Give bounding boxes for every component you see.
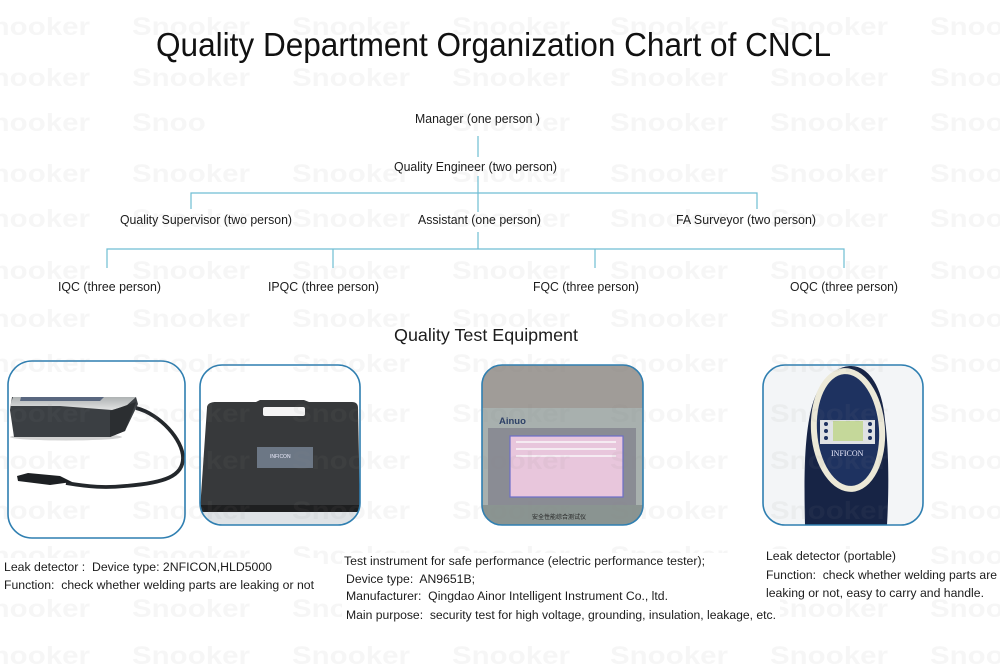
caption: electric performance tester: Manufacturer: Qingdao Ainor Intelligent Instrument Co., ltd. [346, 589, 668, 603]
OQC: OQC (three person) [790, 280, 898, 294]
quality engineer: Quality Engineer (two person) [394, 160, 557, 174]
caption: electric performance tester: Device type: AN9651B; [346, 572, 475, 586]
title: Quality Department Organization Chart of CNCL [156, 26, 831, 63]
caption: portable leak detector [766, 549, 997, 600]
IQC: IQC (three person) [58, 280, 161, 294]
caption: leak detector: Function: check whether welding parts are leaking or not [4, 578, 315, 592]
org chart labels [58, 112, 898, 294]
photo: leak detector with cable [8, 361, 185, 538]
photo: electric performance tester [482, 365, 643, 525]
quality supervisor: Quality Supervisor (two person) [120, 213, 292, 227]
caption: portable leak detector: leaking or not, easy to carry and handle. [766, 586, 984, 600]
caption: electric performance tester: Main purpose: security test for high voltage, grounding, insulation, leakage, etc. [346, 608, 776, 622]
FQC: FQC (three person) [533, 280, 639, 294]
org chart connectors [107, 136, 844, 268]
photo: portable leak detector [763, 365, 923, 525]
caption: electric performance tester: Test instrument for safe performance (electric performance tester); [344, 554, 705, 568]
photo: electric performance tester: 安全性能综合测试仪 [532, 513, 586, 521]
manager: Manager (one person ) [415, 112, 540, 126]
FA surveyor: FA Surveyor (two person) [676, 213, 816, 227]
caption: electric performance tester [344, 554, 776, 622]
caption: portable leak detector: Leak detector (portable) [766, 549, 896, 563]
caption: leak detector [4, 560, 315, 592]
photo: black carrying case: INFICON [270, 454, 291, 460]
photo: black carrying case [200, 365, 360, 525]
photo: electric performance tester: Ainuo [499, 416, 526, 427]
caption: portable leak detector: Function: check whether welding parts are [766, 568, 997, 582]
assistant: Assistant (one person) [418, 213, 541, 227]
IPQC: IPQC (three person) [268, 280, 379, 294]
caption: leak detector: Leak detector : Device type: 2NFICON,HLD5000 [4, 560, 272, 574]
photo: portable leak detector: INFICON [831, 449, 864, 458]
section heading: quality test equipment: Quality Test Equipment [394, 325, 578, 345]
